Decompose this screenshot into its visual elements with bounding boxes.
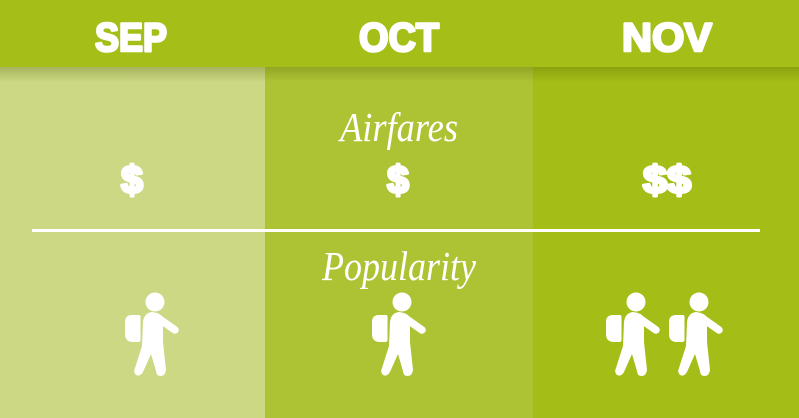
price: NOV two dollars: $$ xyxy=(643,159,691,202)
divider line xyxy=(32,229,760,232)
panel: September column xyxy=(0,67,265,418)
price: OCT one dollar: $ xyxy=(387,159,409,202)
heading: Airfares: Airfares xyxy=(337,104,458,150)
header shadow xyxy=(0,67,799,82)
icon: hiker OCT xyxy=(372,292,422,376)
icon: hiker NOV right xyxy=(669,292,719,376)
month label: SEP: SEP xyxy=(95,16,167,60)
icon: hiker SEP xyxy=(125,292,175,376)
panel: October column xyxy=(265,67,533,418)
month label: NOV: NOV xyxy=(622,16,712,60)
heading: Popularity: Popularity xyxy=(321,243,477,289)
header band xyxy=(0,0,799,67)
panel: November column xyxy=(533,67,799,418)
month label: OCT: OCT xyxy=(359,16,439,60)
icon: hiker NOV left xyxy=(606,292,656,376)
price: SEP one dollar: $ xyxy=(121,159,143,202)
